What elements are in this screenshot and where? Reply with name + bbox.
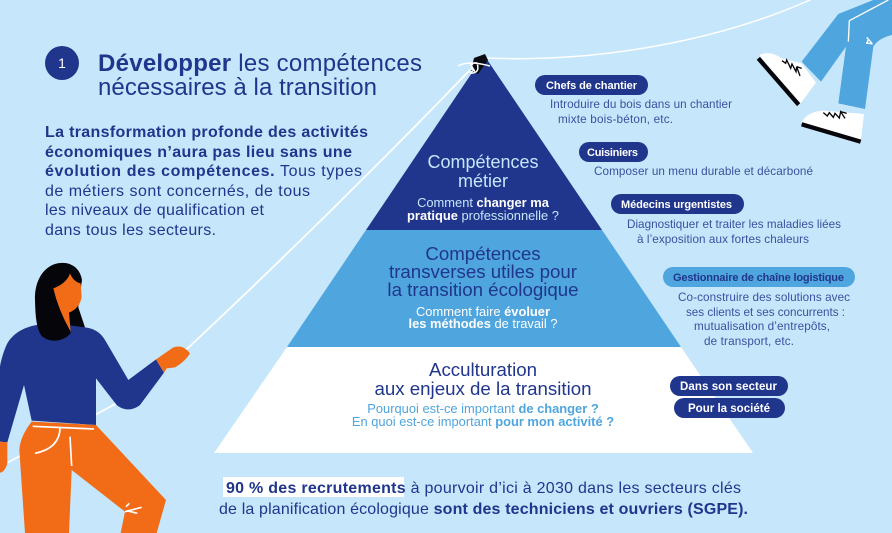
intro paragraph: de métiers sont concernés, de tous: [45, 183, 310, 200]
pyramid text: acculturation: En quoi est-ce important pour mon activité ?: [352, 414, 614, 429]
illustration: walking legs: [758, 0, 892, 143]
title: [98, 50, 422, 101]
hands: [0, 346, 190, 473]
callout: site managers: [535, 75, 732, 126]
bottom statistic: de la planification écologique sont des techniciens et ouvriers (SGPE).: [219, 501, 748, 518]
pyramid text: job skills: pratique professionnelle ?: [407, 208, 559, 223]
intro paragraph: dans tous les secteurs.: [45, 222, 216, 239]
pyramid text: job skills: Compétences: [427, 152, 539, 172]
callout: site managers: mixte bois-béton, etc.: [558, 113, 673, 126]
pyramid text: transversal skills: les méthodes de travail ?: [408, 316, 558, 331]
intro paragraph: les niveaux de qualification et: [45, 202, 265, 219]
legs: [802, 0, 892, 109]
callout: emergency doctors: à l’exposition aux fortes chaleurs: [637, 233, 809, 246]
pyramid text: transversal skills: transverses utiles pour: [389, 261, 577, 282]
title: Développer les compétences: [98, 50, 422, 77]
callout: site managers: Chefs de chantier: [546, 80, 638, 92]
hair: [35, 263, 85, 341]
callout: emergency doctors: Médecins urgentistes: [621, 199, 732, 211]
pill: for society: Pour la société: [688, 403, 770, 415]
callout: emergency doctors: [611, 194, 841, 246]
shoe upper: [759, 53, 816, 105]
pill: in one's sector: [670, 376, 788, 396]
knot at pyramid top: [458, 54, 490, 74]
bottom statistic: 90 % des recrutements à pourvoir d’ici à 2030 dans les secteurs clés: [226, 480, 741, 497]
rope line: [7, 0, 810, 463]
pyramid text: transversal skills: Comment faire évoluer: [416, 304, 550, 319]
intro paragraph: [45, 124, 368, 239]
intro paragraph: La transformation profonde des activités: [45, 124, 368, 141]
pyramid text: acculturation: Pourquoi est-ce important de changer ?: [367, 401, 599, 416]
pyramid text: acculturation: aux enjeux de la transition: [374, 378, 592, 399]
second shoe sole: [802, 124, 861, 142]
pyramid text: acculturation: [352, 359, 614, 429]
shoe laces: [782, 60, 802, 76]
intro paragraph: évolution des compétences. Tous types: [45, 163, 362, 180]
pyramid text: job skills: métier: [458, 171, 508, 191]
pyramid level: transversal skills: [287, 230, 681, 347]
illustration: woman: [0, 263, 190, 533]
callout: supply chain manager: [663, 267, 855, 348]
leg details: [848, 0, 888, 44]
number badge: [45, 46, 79, 80]
callout: supply chain manager: ses clients et ses concurrents :: [686, 306, 845, 319]
pyramid text: transversal skills: la transition écologique: [387, 279, 579, 300]
pill: in one's sector: Dans son secteur: [680, 381, 778, 393]
pyramid text: acculturation: Acculturation: [429, 359, 537, 380]
callout: cooks: Composer un menu durable et décarboné: [594, 165, 813, 178]
face: [53, 273, 82, 332]
pyramid text: job skills: Comment changer ma: [417, 195, 550, 210]
trousers: [19, 422, 166, 533]
second shoe laces: [823, 112, 847, 118]
bottom statistic: [219, 477, 748, 518]
trouser details: [33, 426, 142, 513]
callout: supply chain manager: Co-construire des solutions avec: [678, 291, 850, 304]
sweater: [0, 324, 164, 442]
title: nécessaires à la transition: [98, 74, 377, 101]
pyramid text: transversal skills: [387, 243, 579, 331]
callout: cooks: [579, 142, 813, 178]
callout: emergency doctors: Diagnostiquer et traiter les maladies liées: [627, 218, 841, 231]
callout: site managers: Introduire du bois dans un chantier: [550, 98, 732, 111]
number badge: 1: [58, 55, 66, 71]
callout: cooks: Cuisiniers: [587, 147, 638, 159]
second shoe upper: [802, 111, 864, 143]
callout: supply chain manager: mutualisation d’entrepôts,: [694, 320, 830, 333]
callout: supply chain manager: de transport, etc.: [704, 335, 794, 348]
pyramid text: job skills: [407, 152, 559, 223]
intro paragraph: économiques n’aura pas lieu sans une: [45, 144, 352, 161]
shoe sole: [758, 58, 799, 105]
pyramid text: transversal skills: Compétences: [425, 243, 541, 264]
pyramid: [214, 55, 753, 453]
callout: supply chain manager: Gestionnaire de chaîne logistique: [673, 272, 844, 284]
pyramid level: acculturation: [214, 347, 753, 453]
pyramid level: job skills: [366, 55, 602, 230]
pill: for society: [674, 398, 785, 418]
